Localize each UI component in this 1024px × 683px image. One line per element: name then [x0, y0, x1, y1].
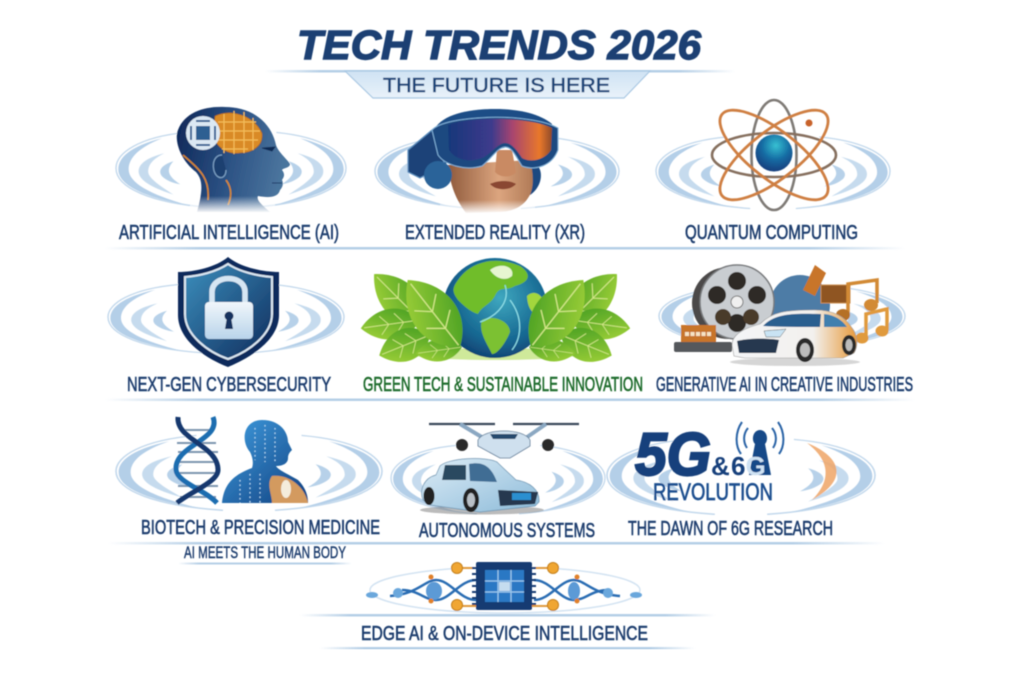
- panel: biotech: [116, 417, 382, 539]
- banner: subtitle: THE FUTURE IS HERE: [383, 75, 610, 97]
- icon: digital person: [222, 420, 308, 503]
- label: EDGE AI & ON-DEVICE INTELLIGENCE: [361, 623, 648, 645]
- icon: car: [730, 310, 860, 366]
- icon: AI head: [177, 107, 290, 213]
- title: TECH TRENDS 2026: [297, 22, 702, 68]
- subtitle: AI meets the human body: AI MEETS THE HUMAN BODY: [184, 543, 346, 562]
- label: THE DAWN OF 6G RESEARCH: [628, 518, 833, 540]
- label: EXTENDED REALITY (XR): [405, 222, 585, 244]
- icon: atom: [707, 95, 841, 215]
- icon: circuit: [366, 562, 642, 613]
- heading: revolution: REVOLUTION: [653, 479, 773, 506]
- icon: chip: [472, 562, 536, 610]
- panel: edge AI: [300, 562, 715, 650]
- panel: artificial intelligence: [116, 107, 346, 244]
- swirl: [391, 446, 605, 514]
- heading: 5G & 6G: &: [711, 451, 730, 481]
- label: QUANTUM COMPUTING: [685, 222, 858, 244]
- banner: subtitle: [265, 70, 735, 98]
- heading: 5G & 6G: [635, 421, 766, 488]
- heading: 5G & 6G: 6G: [731, 451, 766, 481]
- icon: leaves left: [359, 261, 478, 371]
- icon: shield and lock: [178, 257, 279, 367]
- icon: car: [420, 459, 544, 514]
- panel: 5G and 6G: [607, 421, 875, 540]
- swirl: [108, 284, 344, 353]
- panel: cybersecurity: [108, 257, 344, 396]
- panel: quantum computing: [656, 95, 890, 244]
- swirl: [116, 436, 382, 510]
- icon: DNA helix: [176, 417, 218, 503]
- icon: antenna tower: [737, 422, 783, 475]
- label: BIOTECH & PRECISION MEDICINE: [141, 517, 380, 539]
- panel: autonomous systems: [391, 424, 605, 542]
- icon: film reel: [674, 265, 830, 352]
- heading: 5G & 6G: 5G: [635, 421, 711, 488]
- orange streak: [807, 443, 837, 500]
- label: NEXT-GEN CYBERSECURITY: [127, 374, 331, 396]
- panel: green tech: [359, 258, 643, 396]
- label: ARTIFICIAL INTELLIGENCE (AI): [119, 222, 339, 244]
- panel: extended reality: [375, 109, 619, 244]
- swirl: [607, 440, 875, 514]
- label: GREEN TECH & SUSTAINABLE INNOVATION: [363, 374, 643, 396]
- swirl: [375, 137, 619, 208]
- ground glow: [410, 348, 580, 360]
- panel: generative AI: [656, 265, 913, 396]
- swirl: [659, 286, 905, 348]
- swirl: [116, 132, 346, 207]
- icon: globe: [443, 258, 547, 358]
- label: AUTONOMOUS SYSTEMS: [419, 520, 595, 542]
- page content: [105, 22, 915, 650]
- icon: leaves right: [513, 261, 632, 371]
- icon: tools and music notes: [803, 265, 888, 344]
- swirl: [656, 137, 890, 208]
- icon: flying drone: [429, 424, 579, 458]
- icon: XR headset: [408, 109, 558, 214]
